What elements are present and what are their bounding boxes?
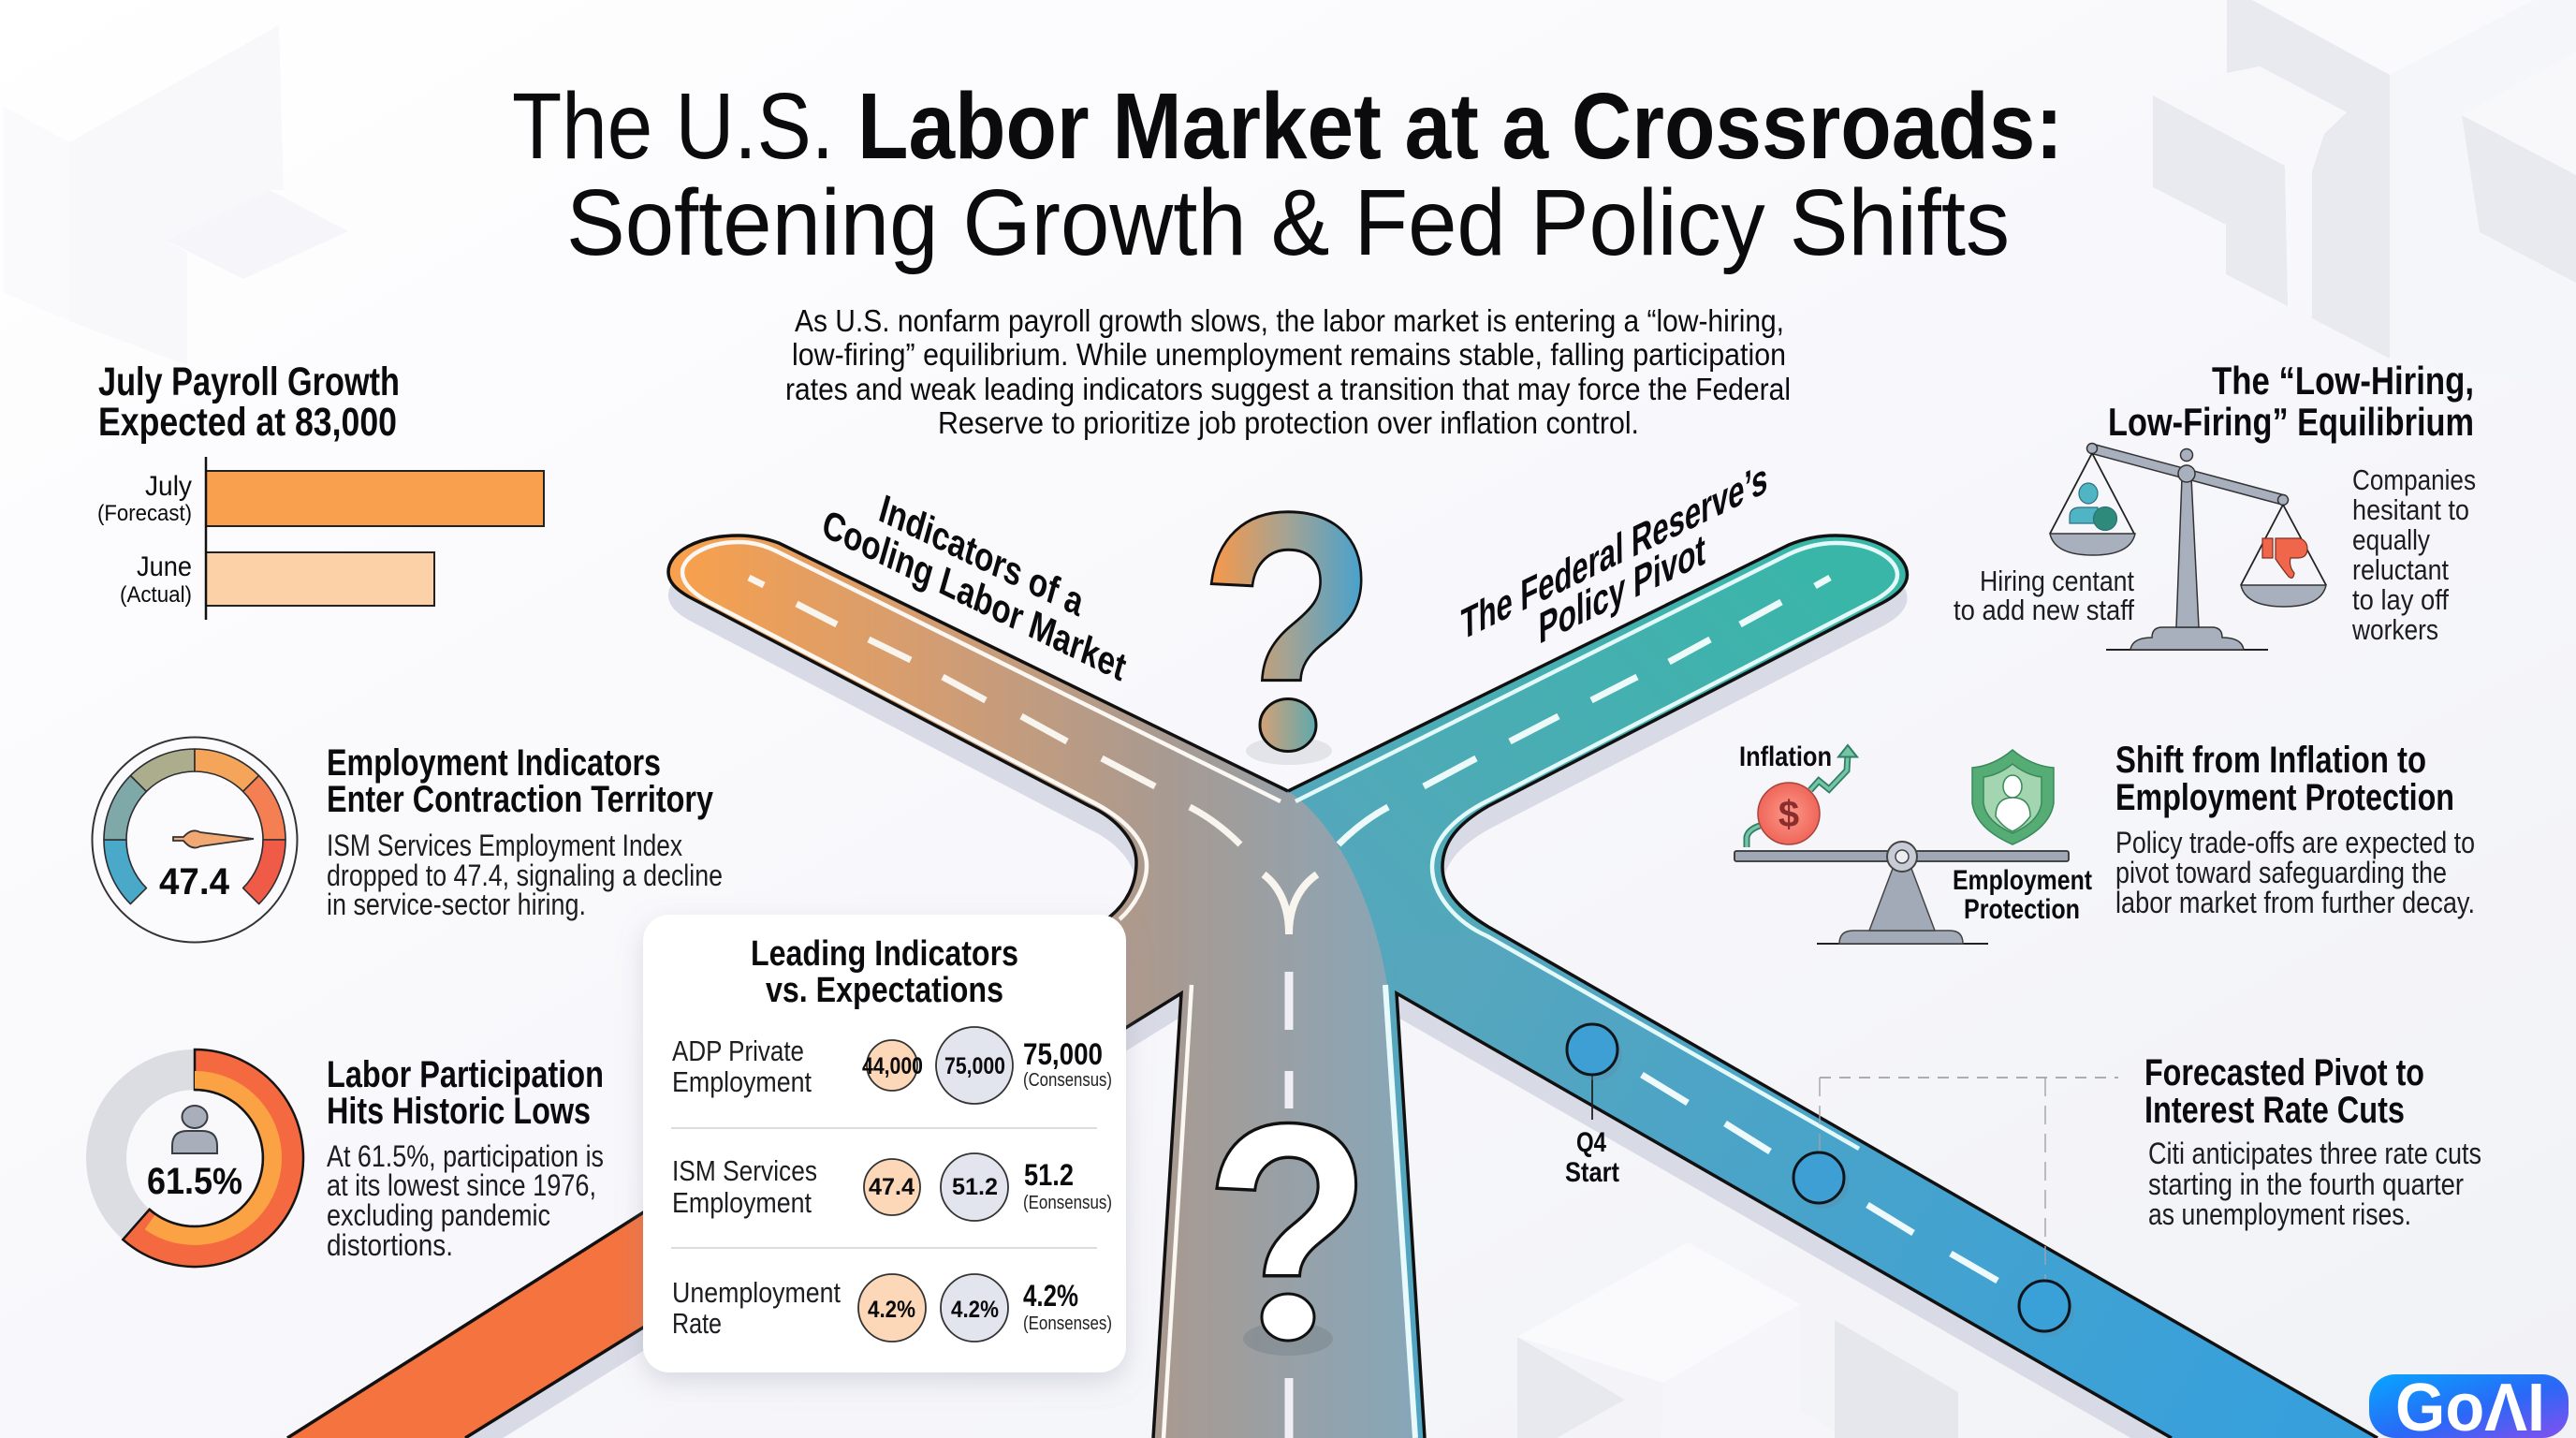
panel: employment indicators [92,738,723,942]
row: ADP private employment: ADP Private [672,1034,804,1067]
row: unemployment rate: Rate [672,1307,722,1340]
lane dashes [749,578,1998,1438]
heading: Expected at 83,000 [98,400,397,445]
description: Citi anticipates three rate cuts [2148,1137,2481,1170]
intro paragraph: low-firing” equilibrium. While unemployment remains stable, falling participation [792,337,1786,372]
crossroads road graphic [286,534,2378,1438]
road edge lines [682,542,1897,1438]
bar chart: (Forecast) [97,501,192,526]
description: in service-sector hiring. [327,888,586,921]
label: Q4 start: Q4 [1576,1127,1606,1158]
icon: white question mark on road: ? [1204,1060,1372,1407]
bar chart [97,457,544,620]
panel: July payroll growth [97,360,544,620]
panel: low-hiring low-firing equilibrium [1954,359,2476,650]
hiring caption [1954,565,2134,626]
row: unemployment rate: 4.2% [1023,1279,1078,1313]
icon: balance scale tilted [2050,444,2326,650]
firing caption: reluctant [2352,553,2449,586]
row: unemployment rate: Unemployment [672,1276,841,1309]
description: at its lowest since 1976, [327,1168,596,1202]
row: ADP private employment: (Consensus) [1023,1070,1112,1091]
heading [2144,1052,2424,1131]
label: Q4 start [1565,1127,1619,1188]
row: ADP private employment: 44,000 [862,1053,923,1079]
description: pivot toward safeguarding the [2115,856,2447,889]
heading [327,1054,604,1132]
row: ADP private employment: 75,000 [944,1053,1005,1079]
icon: gradient question mark [1209,510,1363,765]
intro paragraph: Reserve to prioritize job protection over inflation control. [938,405,1639,440]
hiring caption: to add new staff [1954,594,2134,626]
donut chart [107,1049,303,1267]
road label: indicators of a cooling labor market: Indicators of a [875,486,1089,625]
row: ISM services employment: 51.2 [1024,1158,1074,1192]
gauge chart: 47.4 [159,861,230,902]
description: ISM Services Employment Index [327,829,682,862]
icon: thumbs down [2262,538,2307,578]
road label: the federal reserve's policy pivot: Policy Pivot [1538,525,1705,653]
description: starting in the fourth quarter [2148,1167,2464,1201]
intro paragraph: As U.S. nonfarm payroll growth slows, the labor market is entering a “low-hiring, [795,303,1784,338]
rate cut timeline connectors [1592,1075,2118,1281]
row: ISM services employment: ISM Services [672,1154,817,1187]
description: Policy trade-offs are expected to [2115,826,2475,859]
heading [751,934,1018,1010]
panel: labor participation [107,1049,604,1267]
road label: the federal reserve's policy pivot: The Federal Reserve’s [1460,453,1768,650]
label: Q4 start: Start [1565,1157,1619,1188]
title: Labor Market at a Crossroads: [857,74,2063,179]
row: ISM services employment: Employment [672,1186,812,1219]
title: The U.S. [512,74,834,179]
heading: Employment Indicators [327,742,661,784]
row: ADP private employment: 75,000 [1023,1037,1103,1071]
icon: gradient question mark: ? [1198,441,1378,825]
heading: Employment Protection [2115,777,2454,818]
heading: Low-Firing” Equilibrium [2108,400,2474,444]
row: unemployment rate: 4.2% [868,1297,915,1323]
label: employment protection: Employment [1953,865,2092,896]
icon: employment shield [1972,750,2054,844]
panel: forecasted pivot to interest rate cuts [1565,1024,2481,1337]
donut chart: 61.5% [147,1161,242,1202]
row: unemployment rate: 4.2% [951,1297,999,1323]
icon: dollar coin with rising arrow: $ [1778,794,1799,835]
heading: July Payroll Growth [98,360,400,404]
icon: person hiring [2070,483,2117,530]
heading: Enter Contraction Territory [327,779,714,820]
icon: dollar coin with rising arrow [1747,745,1857,847]
description [327,1139,604,1262]
description: as unemployment rises. [2148,1197,2411,1231]
icon: seesaw balance [1734,842,2069,944]
bar chart: July [145,471,192,502]
icon: white question mark on road [1215,1122,1357,1356]
firing caption: equally [2352,523,2430,556]
heading: Interest Rate Cuts [2144,1090,2405,1131]
description: excluding pandemic [327,1198,550,1232]
firing caption: hesitant to [2352,493,2469,526]
label: employment protection [1953,865,2092,925]
heading: Hits Historic Lows [327,1091,591,1132]
description [2148,1137,2481,1231]
row: ADP private employment: Employment [672,1065,812,1098]
heading [2115,740,2454,818]
heading: Forecasted Pivot to [2144,1052,2424,1093]
firing caption: workers [2351,613,2438,646]
heading [98,360,400,445]
bar chart: (Actual) [120,582,192,608]
heading: vs. Expectations [766,971,1003,1010]
timeline markers [1567,1024,2074,1337]
description: labor market from further decay. [2115,886,2475,919]
row: unemployment rate: (Eonsenses) [1023,1313,1112,1334]
row: unemployment rate [672,1274,1112,1342]
label: inflation: Inflation [1739,741,1832,772]
firing caption [2351,463,2476,646]
gauge chart [92,738,298,942]
row: ISM services employment: 47.4 [869,1174,915,1200]
description: distortions. [327,1228,453,1262]
road label: the federal reserve's policy pivot [1460,453,1768,653]
panel: leading indicators vs expectations [643,915,1126,1372]
panel: shift from inflation to employment protection [1734,740,2475,944]
heading: Leading Indicators [751,934,1018,974]
intro paragraph: rates and weak leading indicators suggest a transition that may force the Federal [785,372,1791,406]
description [2115,826,2475,919]
bar chart: June [137,551,192,582]
heading: Labor Participation [327,1054,604,1095]
heading [2108,359,2474,444]
row: ADP private employment [672,1027,1112,1104]
title [512,74,2063,275]
description [327,829,723,921]
row: ISM services employment [672,1153,1112,1221]
hiring caption: Hiring centant [1980,565,2134,597]
label: employment protection: Protection [1964,894,2080,925]
icon: person [172,1106,217,1153]
road label: indicators of a cooling labor market: Cooling Labor Market [818,501,1131,690]
row: ISM services employment: (Eonsensus) [1023,1193,1112,1213]
row: ISM services employment: 51.2 [952,1174,998,1200]
heading: Shift from Inflation to [2115,740,2426,781]
intro paragraph [785,303,1791,440]
firing caption: to lay off [2352,583,2449,616]
heading: The “Low-Hiring, [2212,359,2474,403]
title: Softening Growth & Fed Policy Shifts [566,170,2010,275]
firing caption: Companies [2352,463,2476,496]
description: At 61.5%, participation is [327,1139,604,1173]
description: dropped to 47.4, signaling a decline [327,858,723,892]
heading [327,742,714,820]
